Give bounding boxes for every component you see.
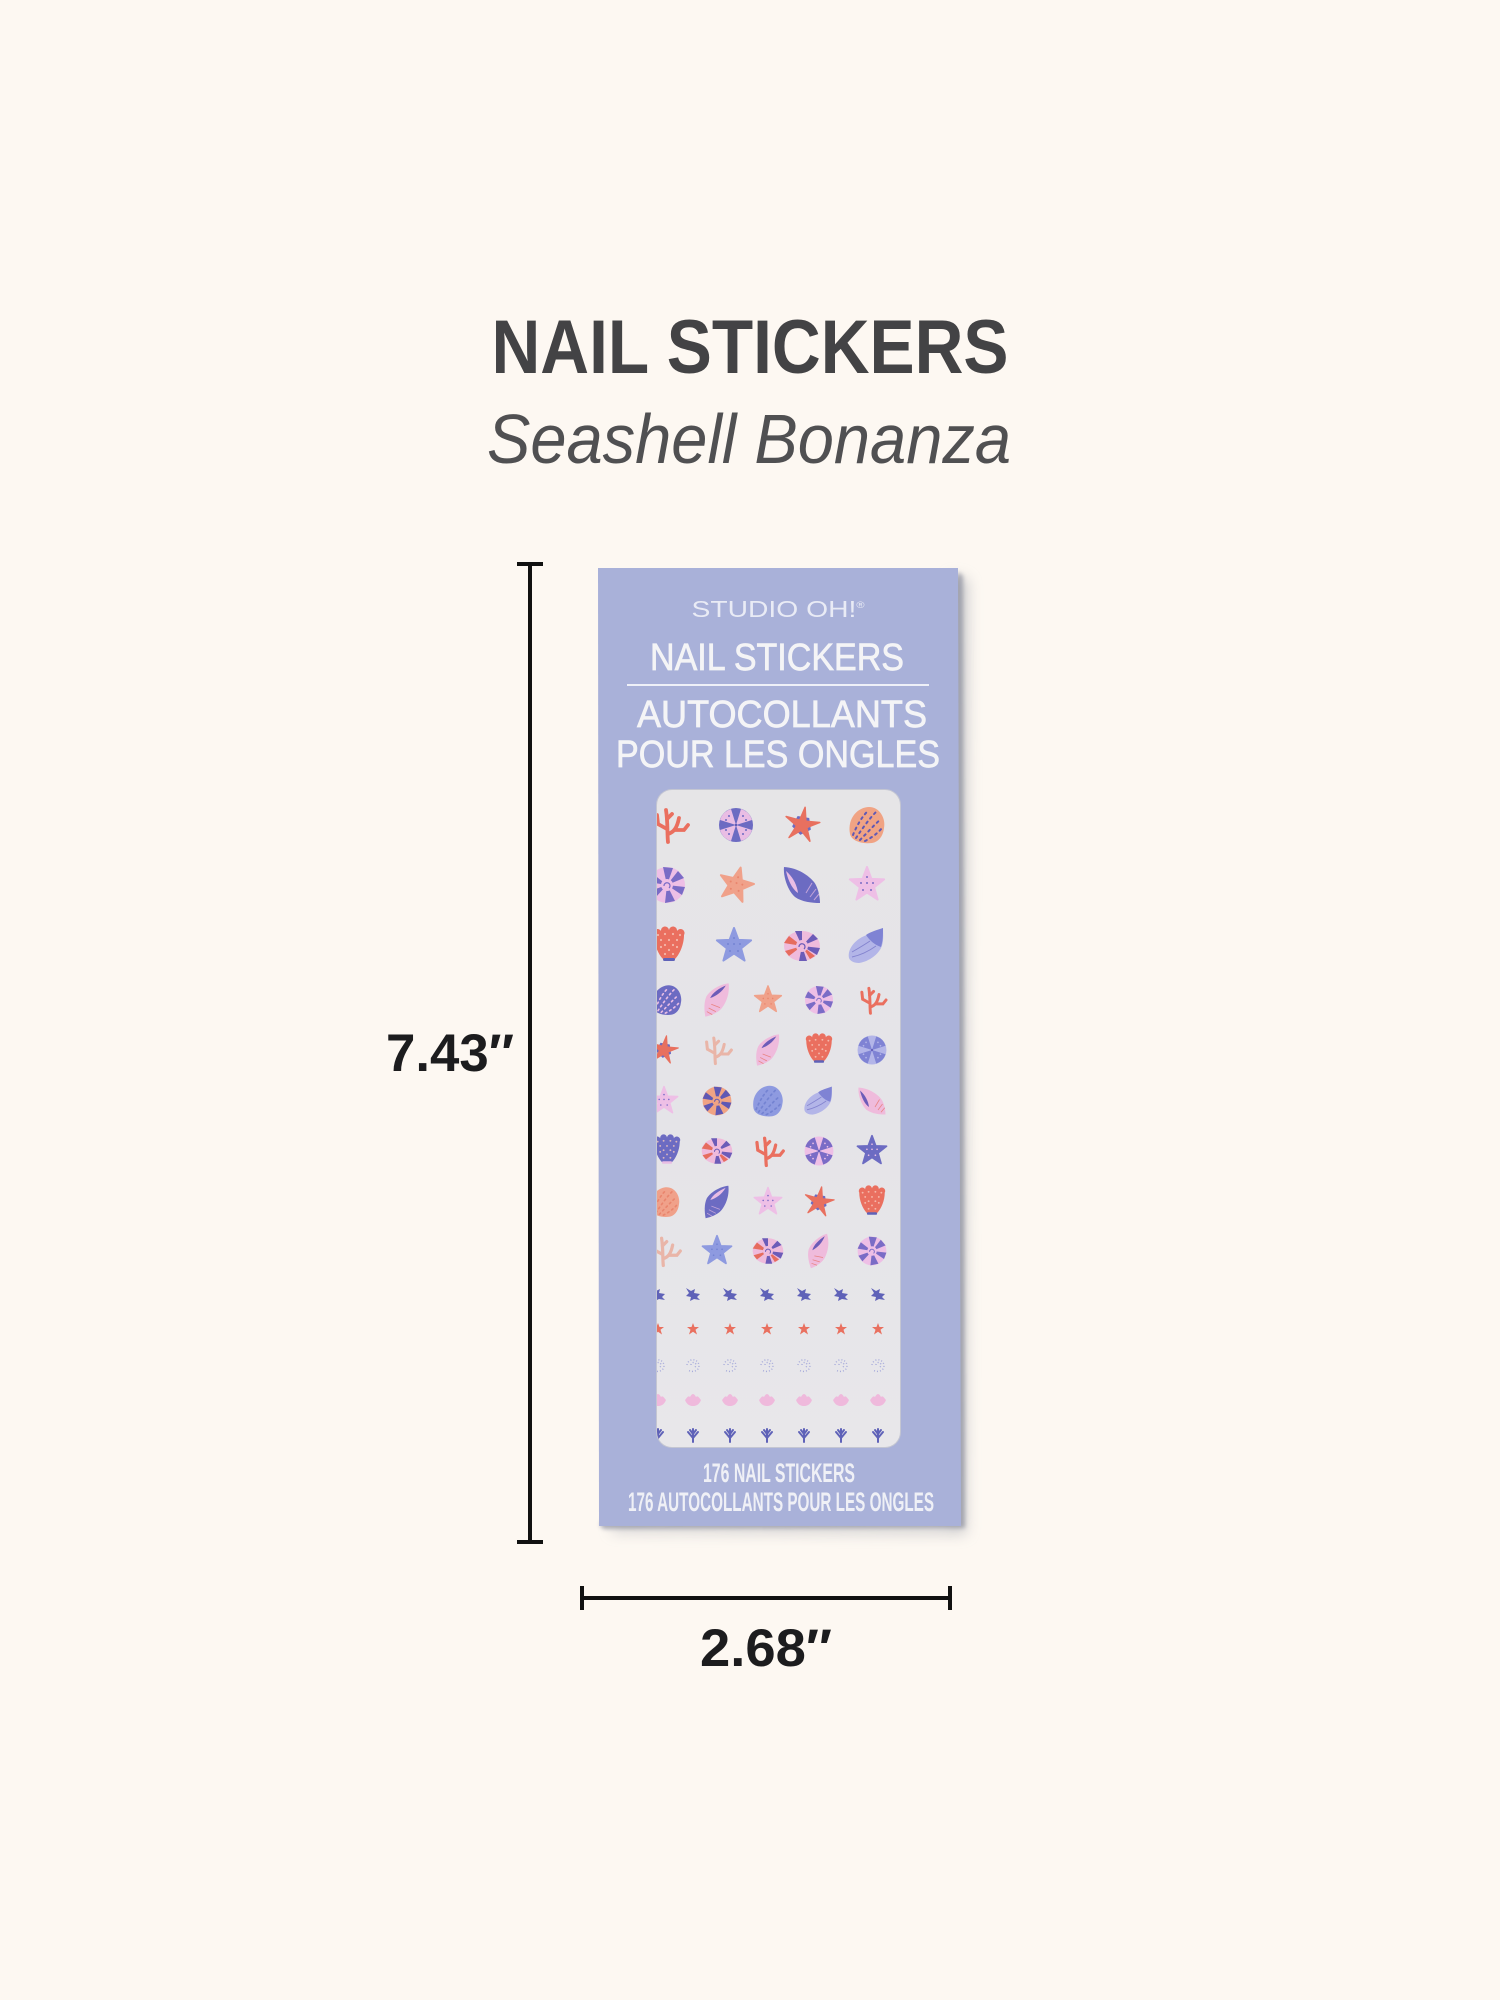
sticker row 9 <box>654 1234 886 1268</box>
tiny sticker row: pink shells <box>650 1394 886 1406</box>
sticker row 2 <box>657 866 885 903</box>
height label: 7.43″ <box>386 1024 514 1083</box>
heading: french title: AUTOCOLLANTS <box>637 694 927 736</box>
sticker row 3 <box>653 926 883 963</box>
width dimension ruler <box>582 1586 950 1610</box>
sticker count: 176 NAIL STICKERS <box>703 1458 855 1488</box>
sticker row 6 <box>650 1086 886 1117</box>
tiny sticker row: stars <box>652 1323 884 1334</box>
tiny sticker row: coral <box>653 1429 883 1442</box>
panel: product card <box>598 568 968 1534</box>
sticker row 4 <box>653 983 886 1017</box>
sticker row 5 <box>648 1033 886 1066</box>
heading: french title: POUR LES ONGLES <box>616 734 940 776</box>
sticker row 7 <box>654 1134 887 1165</box>
sticker row 8 <box>651 1184 885 1218</box>
tiny sticker row: dotted spirals <box>652 1360 884 1371</box>
sticker row 1 <box>657 804 884 843</box>
brand name: ® <box>856 600 865 610</box>
brand name: STUDIO OH! <box>692 596 826 622</box>
tiny sticker row: seaweed <box>651 1288 885 1301</box>
sticker count <box>628 1458 934 1517</box>
sticker window <box>648 789 901 1448</box>
heading: nail stickers: NAIL STICKERS <box>650 637 904 679</box>
heading: french title <box>616 694 940 776</box>
subtitle: Seashell Bonanza <box>487 400 1011 478</box>
width label: 2.68″ <box>700 1619 832 1678</box>
title: NAIL STICKERS <box>492 305 1008 390</box>
height dimension ruler <box>517 564 543 1542</box>
sticker count: 176 AUTOCOLLANTS POUR LES ONGLES <box>628 1487 934 1517</box>
